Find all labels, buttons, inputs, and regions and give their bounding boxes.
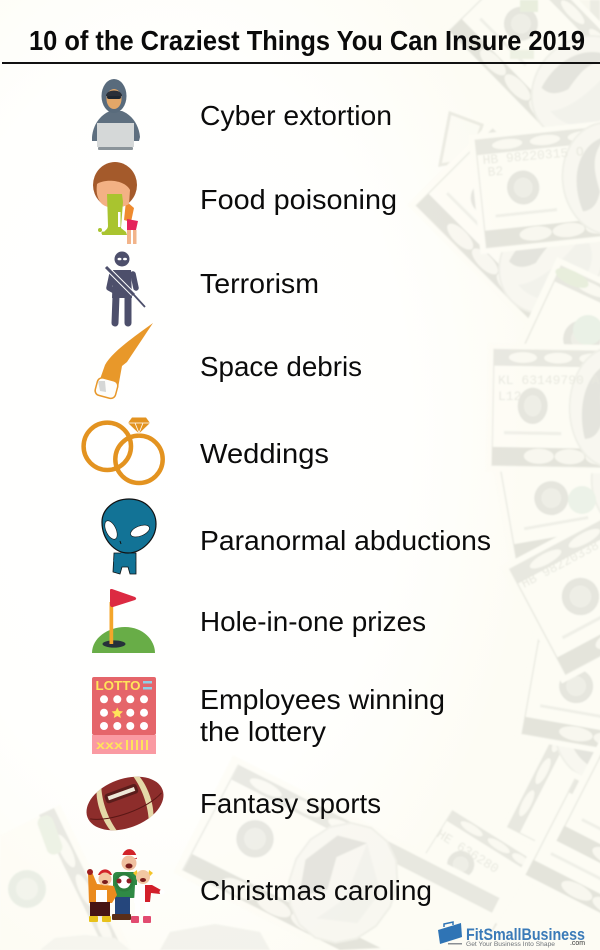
- icon: hacker at laptop: [92, 79, 140, 150]
- item: cyber extortion: [92, 79, 392, 150]
- item: paranormal abductions: [102, 499, 491, 574]
- item: hole-in-one prizes: [92, 589, 426, 653]
- icon: alien: [102, 499, 156, 574]
- label line two: the lottery: [200, 716, 326, 747]
- logo: Fit Small Business: [438, 922, 585, 948]
- label: Paranormal abductions: [200, 525, 491, 556]
- item: space debris: [94, 323, 362, 400]
- icon: wedding rings with diamond: [84, 418, 163, 483]
- title rule: [2, 62, 600, 64]
- icon: carolers: [87, 849, 164, 923]
- item: fantasy sports: [79, 767, 381, 840]
- background: scattered hundred dollar bills: HE 636280: [434, 827, 501, 877]
- item: christmas caroling: [87, 849, 432, 923]
- label: Cyber extortion: [200, 100, 392, 131]
- icon: armed masked figure: [106, 252, 145, 323]
- background: scattered hundred dollar bills: L12: [498, 389, 521, 404]
- label: Hole-in-one prizes: [200, 606, 426, 637]
- icon: lottery ticket: LOTTO: [96, 679, 141, 693]
- label: Weddings: [200, 438, 329, 469]
- item: weddings: [84, 418, 329, 483]
- background: scattered hundred dollar bills: KL 63149790 A: [498, 373, 600, 388]
- icon: briefcase: [438, 922, 462, 944]
- icon: football: [79, 767, 171, 840]
- label: Food poisoning: [200, 184, 397, 215]
- background: scattered hundred dollar bills: HB 98220315 O: [482, 144, 585, 168]
- icon: golf flag and green: [92, 589, 155, 653]
- label: Fantasy sports: [200, 788, 381, 819]
- label: Terrorism: [200, 268, 319, 299]
- item: terrorism: [106, 252, 319, 323]
- logo domain: .com: [570, 940, 585, 947]
- background: scattered hundred dollar bills: B2: [487, 164, 504, 180]
- item: employees winning the lottery: [92, 677, 445, 754]
- logo tagline: Get Your Business Into Shape: [466, 941, 555, 948]
- label: Employees winning: [200, 684, 445, 715]
- icon: lottery ticket: [92, 677, 156, 754]
- item: food poisoning: [93, 162, 397, 244]
- icon: person vomiting: [93, 162, 138, 244]
- label: Space debris: [200, 351, 362, 382]
- icon: lottery ticket: xxx: [96, 738, 123, 752]
- icon: falling comet: [94, 323, 153, 400]
- label: Christmas caroling: [200, 875, 432, 906]
